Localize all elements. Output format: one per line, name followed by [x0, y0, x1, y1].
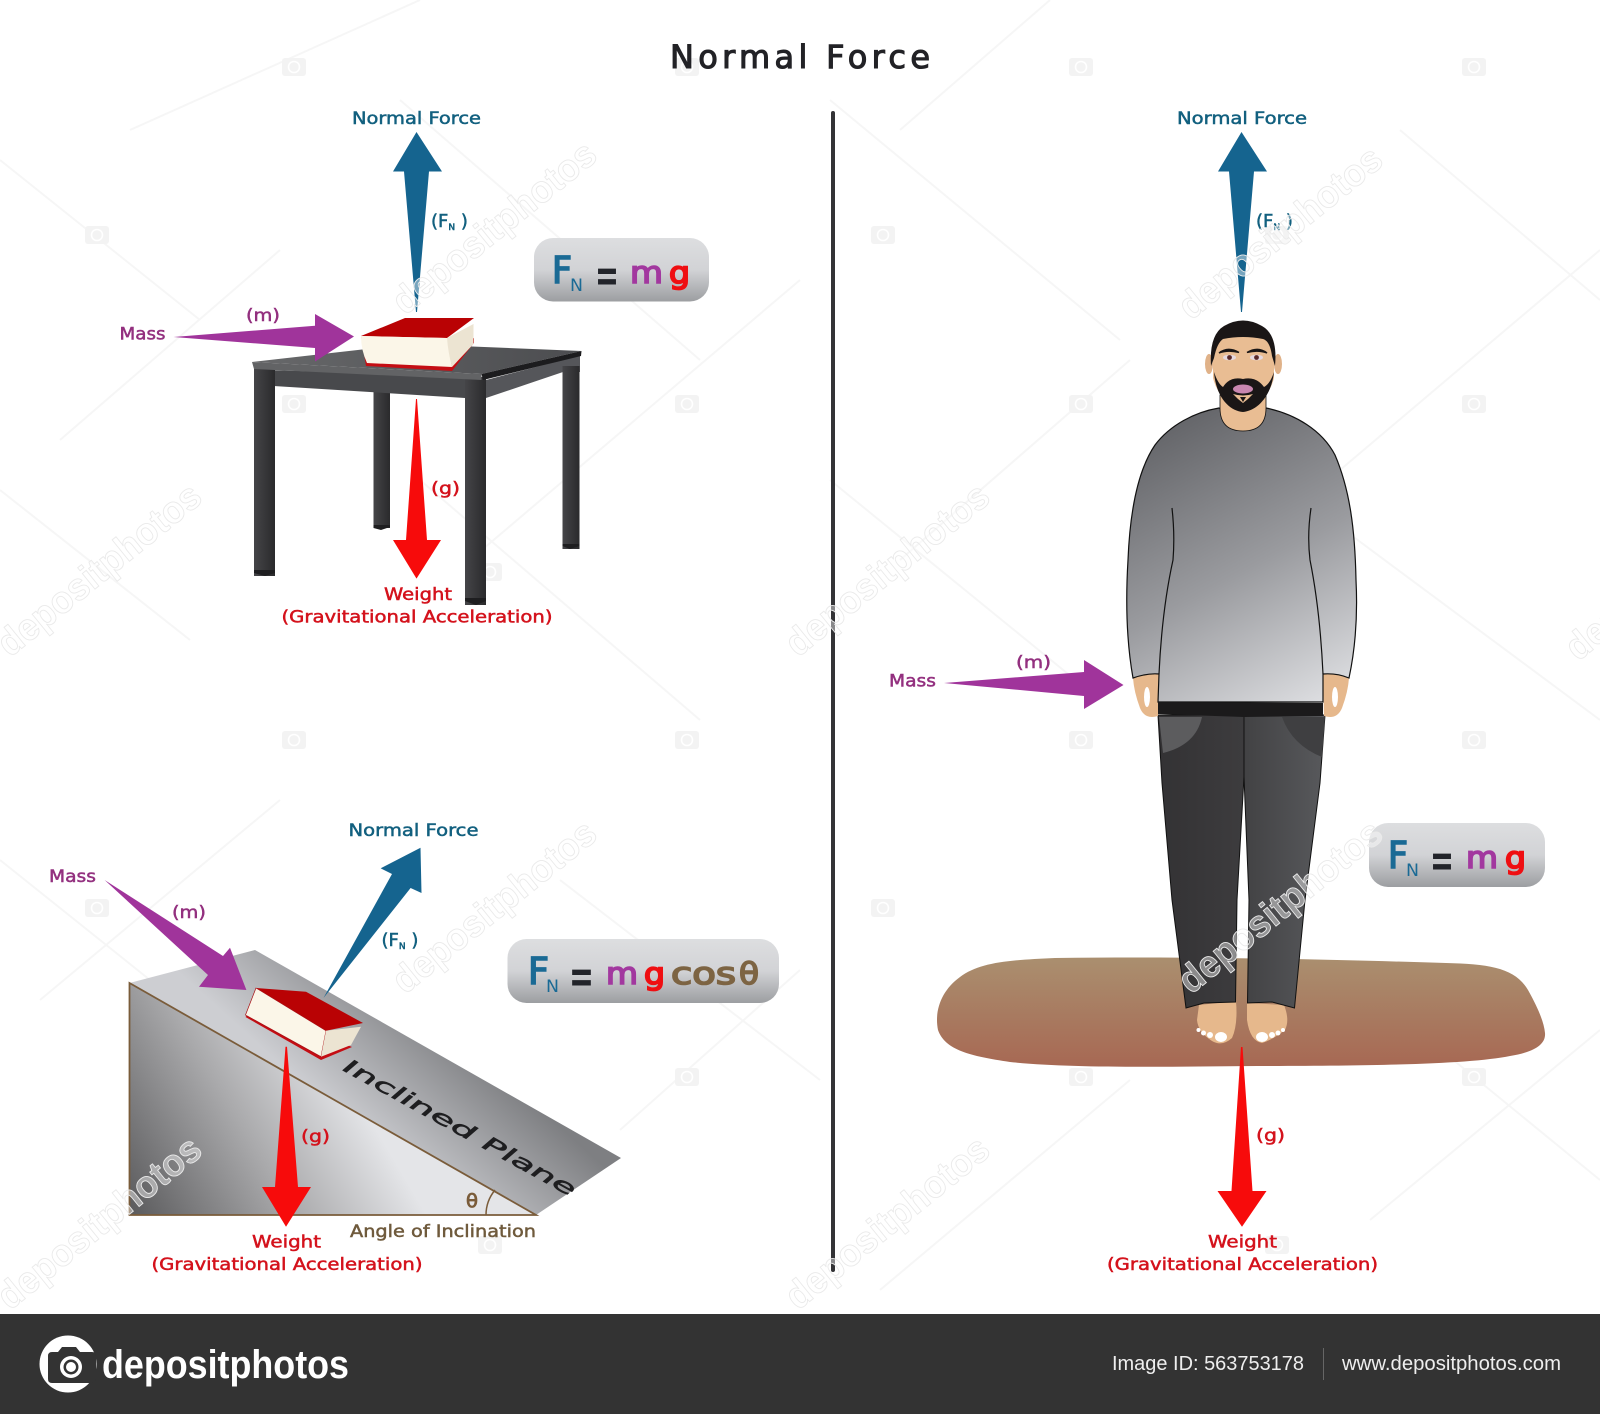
label: gravitational acceleration: (Gravitational Acceleration): [152, 1255, 422, 1275]
formula: FN = mg: =: [595, 248, 619, 302]
formula: FN = mg: m: [630, 256, 663, 291]
text: depositphotos: [384, 133, 605, 323]
arrow: normal force: [324, 848, 422, 998]
footer bar: [0, 1314, 1600, 1414]
label: FN: ): [1280, 211, 1293, 232]
formula: FN = mg: F: [1388, 834, 1408, 877]
man: [1127, 320, 1357, 1043]
beard: [1214, 372, 1274, 412]
waistband: [1158, 702, 1323, 717]
image id: Image ID: 563753178: [1112, 1353, 1304, 1375]
hands: [1133, 674, 1349, 717]
label: m: (m): [1016, 653, 1051, 673]
label: FN: N: [1273, 223, 1280, 233]
label: gravitational acceleration: (Gravitational Acceleration): [282, 608, 552, 628]
angle arc: [486, 1190, 495, 1215]
label: g: (g): [301, 1127, 330, 1147]
formula: FN = mg cos theta: F: [528, 950, 549, 993]
formula: FN = mg: m: [1466, 841, 1498, 876]
text: inclined plane: Inclined Plane: [340, 1053, 580, 1201]
label: FN: (F: [431, 211, 448, 232]
incline surface: [130, 950, 621, 1215]
book: [361, 318, 474, 371]
arrow: normal force: [1218, 132, 1267, 312]
formula: FN = mg cos theta: =: [569, 949, 594, 1003]
text: depositphotos: [777, 475, 998, 665]
arrow: mass: [174, 314, 354, 362]
book: [246, 988, 363, 1060]
label: weight: Weight: [1208, 1232, 1277, 1252]
icon: camera logo: [40, 1336, 96, 1392]
shirt: [1127, 408, 1357, 702]
formula: FN = mg: =: [1430, 833, 1454, 887]
label: FN: (F: [1256, 211, 1273, 232]
label: FN: (F: [382, 930, 399, 951]
label: weight: Weight: [252, 1232, 321, 1252]
arrow: gravity: [262, 1047, 311, 1227]
formula: FN = mg: [1369, 823, 1545, 887]
logo wordmark: depositphotos: [102, 1343, 349, 1387]
label: angle of inclination: Angle of Inclination: [350, 1222, 536, 1242]
panel: book on table: [120, 109, 709, 628]
panel: standing man: [889, 109, 1545, 1275]
table: [252, 344, 582, 605]
formula: FN = mg cos theta: [508, 939, 779, 1003]
panel: inclined plane: [49, 821, 779, 1275]
website: www.depositphotos.com: [1341, 1353, 1561, 1375]
formula: FN = mg: N: [1406, 861, 1419, 881]
label: FN: N: [448, 223, 455, 233]
formula: FN = mg cos theta: cos: [671, 957, 736, 992]
label: FN: N: [399, 942, 406, 952]
neck: [1220, 395, 1266, 431]
arrow: mass: [944, 660, 1124, 709]
label: mass: Mass: [889, 672, 936, 692]
arrow: gravity: [393, 399, 441, 579]
trousers: [1158, 715, 1325, 1008]
label: FN: ): [455, 211, 468, 232]
label: normal force: Normal Force: [352, 109, 481, 129]
label: normal force: Normal Force: [1177, 109, 1307, 129]
arrow: gravity: [1218, 1047, 1266, 1227]
formula: FN = mg: g: [1505, 841, 1526, 876]
eyes: [1219, 349, 1267, 360]
mouth: [1228, 383, 1258, 403]
label: normal force: Normal Force: [348, 821, 478, 841]
vertical divider: [831, 111, 835, 1272]
sleeve seams: [1159, 508, 1323, 674]
label: FN: ): [406, 930, 418, 951]
formula: FN = mg cos theta: m: [606, 957, 638, 992]
formula: FN = mg: g: [669, 256, 690, 291]
formula: FN = mg cos theta: N: [546, 977, 559, 997]
formula: FN = mg cos theta: g: [644, 957, 665, 992]
label: mass: Mass: [120, 324, 166, 344]
label: g: (g): [431, 479, 460, 499]
ground: [937, 957, 1545, 1067]
label: g: (g): [1256, 1126, 1285, 1146]
formula: FN = mg cos theta: θ: [739, 957, 759, 992]
incline triangle: [130, 983, 536, 1215]
label: gravitational acceleration: (Gravitational Acceleration): [1107, 1255, 1378, 1275]
formula: FN = mg: [534, 238, 709, 302]
title: Normal Force: [670, 38, 930, 76]
ears: [1205, 354, 1282, 374]
face: [1213, 332, 1274, 411]
text: depositphotos: [384, 812, 605, 1002]
label: m: (m): [172, 903, 206, 923]
hair: [1211, 320, 1275, 366]
label: mass: Mass: [49, 867, 96, 887]
label: m: (m): [246, 306, 280, 326]
arrow: mass: [105, 880, 246, 990]
text: depositphotos: [1170, 812, 1391, 1002]
label: theta: θ: [466, 1190, 478, 1212]
feet: [1196, 1001, 1287, 1043]
formula: FN = mg: F: [552, 249, 572, 292]
text: depositphotos: [1170, 138, 1391, 328]
arrow: normal force: [393, 132, 442, 312]
text: depositphotos: [777, 1128, 998, 1318]
label: weight: Weight: [384, 585, 452, 605]
formula: FN = mg: N: [570, 276, 583, 296]
